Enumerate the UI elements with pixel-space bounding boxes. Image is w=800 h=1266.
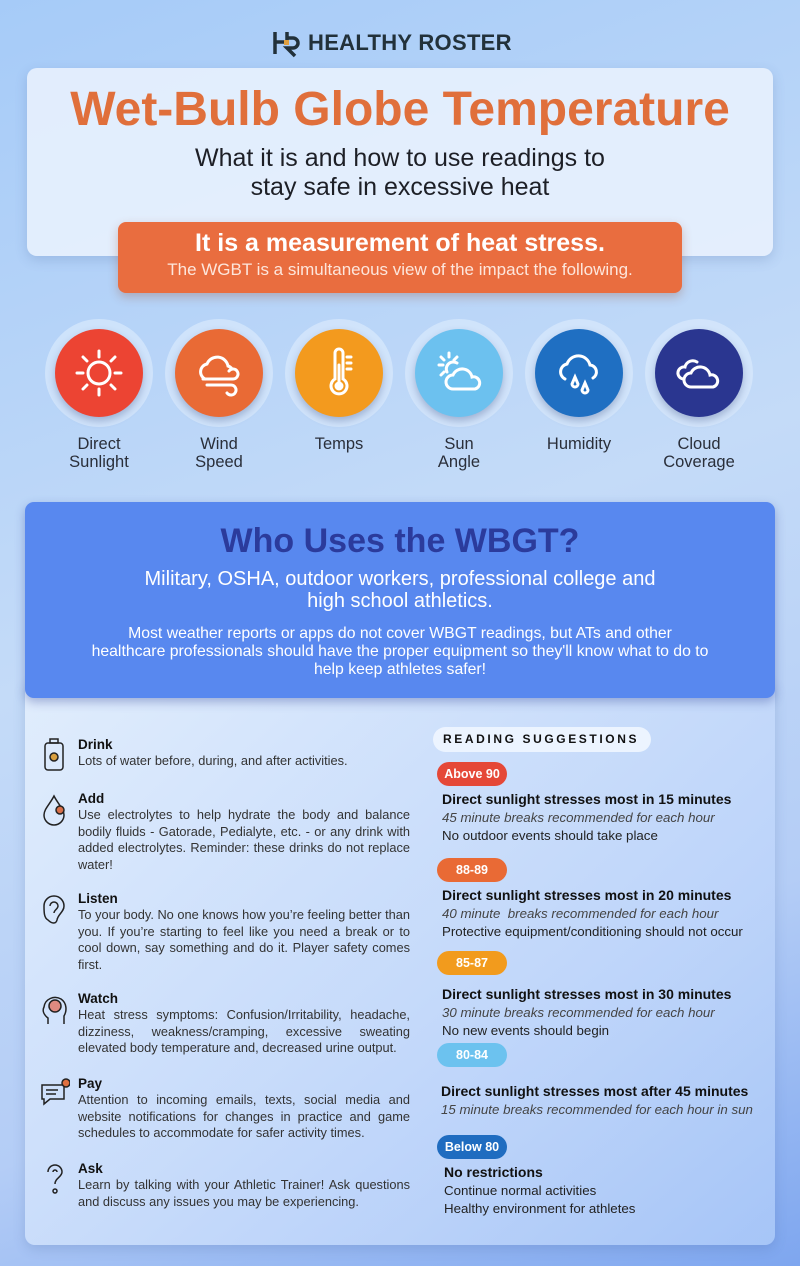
text: 85-87: 30 minute breaks recommended for each hour bbox=[442, 1005, 715, 1020]
text: users: high school athletics. bbox=[307, 590, 493, 612]
badge: 85-87: 85-87 bbox=[456, 956, 488, 970]
item: watch bbox=[42, 991, 410, 1055]
badge: above 90 bbox=[437, 762, 507, 786]
text: below 80 bbox=[444, 1164, 635, 1216]
badge: above 90: Above 90 bbox=[444, 767, 500, 781]
text: 80-84: 15 minute breaks recommended for each hour in sun bbox=[441, 1102, 753, 1117]
text: 88-89: Direct sunlight stresses most in 20 minutes bbox=[442, 887, 731, 903]
panel: title card bbox=[27, 68, 773, 256]
item: drink bbox=[44, 737, 348, 771]
item: ask: Ask bbox=[78, 1161, 103, 1176]
text: 85-87: Direct sunlight stresses most in 30 minutes bbox=[442, 986, 731, 1002]
text: below 80: No restrictions bbox=[444, 1164, 543, 1180]
text: 88-89: 40 minute breaks recommended for each hour bbox=[442, 906, 718, 921]
callout: heat stress bbox=[118, 222, 682, 293]
panel: who uses bbox=[25, 502, 775, 698]
labels: factors: Coverage bbox=[663, 453, 735, 471]
text: above 90: Direct sunlight stresses most in 15 minutes bbox=[442, 791, 731, 807]
badge: 88-89 bbox=[437, 858, 507, 882]
icon: cloud coverage bbox=[645, 319, 753, 427]
text: 85-87 bbox=[442, 986, 731, 1038]
badge: below 80 bbox=[437, 1135, 507, 1159]
badge: 80-84 bbox=[437, 1043, 507, 1067]
subtitle: stay safe in excessive heat bbox=[251, 173, 549, 201]
text: 80-84 bbox=[441, 1083, 753, 1117]
subtitle bbox=[195, 144, 605, 201]
item: drink: Drink bbox=[78, 737, 113, 752]
text: above 90 bbox=[442, 791, 731, 843]
item: pay: Attention to incoming emails, texts, social media and website notifications for changes in practice and game schedules to accommodate for safer activity times. bbox=[78, 1092, 410, 1140]
text: below 80: Continue normal activities bbox=[444, 1183, 596, 1198]
icon: head bbox=[42, 996, 67, 1024]
labels: factors: Sunlight bbox=[69, 453, 129, 471]
labels: factors: Cloud bbox=[677, 435, 721, 453]
labels: factors: Speed bbox=[195, 453, 243, 471]
item: add: Add bbox=[78, 791, 104, 806]
callout: heat stress: The WGBT is a simultaneous view of the impact the following. bbox=[167, 260, 633, 279]
icon: temps bbox=[285, 319, 393, 427]
icon: humidity bbox=[525, 319, 633, 427]
item: ask bbox=[47, 1161, 410, 1208]
text: note bbox=[92, 625, 708, 678]
heading: reading suggestions: READING SUGGESTIONS bbox=[443, 732, 639, 746]
text: 88-89: Protective equipment/conditioning should not occur bbox=[442, 924, 743, 939]
text: above 90: 45 minute breaks recommended for each hour bbox=[442, 810, 715, 825]
title: Wet-Bulb Globe Temperature bbox=[70, 83, 730, 136]
icon: sun angle bbox=[405, 319, 513, 427]
icon: wind bbox=[165, 319, 273, 427]
item: watch: Watch bbox=[78, 991, 118, 1006]
labels: factors: Sun bbox=[444, 435, 474, 453]
labels: factors: Angle bbox=[438, 453, 480, 471]
text: users bbox=[145, 568, 655, 612]
icon: drop bbox=[43, 794, 65, 826]
text: users: Military, OSHA, outdoor workers, professional college and bbox=[145, 568, 655, 590]
text: 85-87: No new events should begin bbox=[442, 1023, 609, 1038]
panel: bottom card bbox=[25, 680, 775, 1245]
badge: below 80: Below 80 bbox=[445, 1140, 499, 1154]
text: note: Most weather reports or apps do not cover WBGT readings, but ATs and other bbox=[128, 625, 672, 642]
labels: factors: Direct bbox=[77, 435, 121, 453]
item: listen: To your body. No one knows how you’re feeling better than you. If you’re starting to feel like you need a break or to cool down, say something and do it. Player safety comes first. bbox=[78, 907, 410, 972]
badge: 88-89: 88-89 bbox=[456, 863, 488, 877]
text: note: help keep athletes safer! bbox=[314, 661, 486, 678]
text: below 80: Healthy environment for athletes bbox=[444, 1201, 635, 1216]
icon: direct sunlight bbox=[45, 319, 153, 427]
item: drink: Lots of water before, during, and after activities. bbox=[78, 753, 348, 768]
item: pay: Pay bbox=[78, 1076, 102, 1091]
text: note: healthcare professionals should have the proper equipment so they'll know what to do to bbox=[92, 643, 708, 660]
badge: 85-87 bbox=[437, 951, 507, 975]
logo: HEALTHY ROSTER bbox=[308, 30, 512, 55]
text: 88-89 bbox=[442, 887, 743, 939]
icon: chat bbox=[41, 1078, 70, 1106]
item: listen: Listen bbox=[78, 891, 118, 906]
labels: factors: Wind bbox=[200, 435, 238, 453]
icon: question bbox=[47, 1164, 63, 1194]
item: ask: Learn by talking with your Athletic Trainer! Ask questions and discuss any issues you may be experiencing. bbox=[78, 1177, 410, 1208]
heading: who uses: Who Uses the WBGT? bbox=[221, 522, 579, 560]
heading: reading suggestions bbox=[433, 727, 651, 752]
text: above 90: No outdoor events should take place bbox=[442, 828, 658, 843]
callout: heat stress: It is a measurement of heat stress. bbox=[195, 229, 605, 257]
labels: factors: Humidity bbox=[547, 435, 611, 453]
item: pay bbox=[41, 1076, 410, 1140]
labels: factors bbox=[69, 435, 735, 471]
labels: factors: Temps bbox=[315, 435, 363, 453]
item: add: Use electrolytes to help hydrate the body and balance bodily fluids - Gatorade, Pedialyte, etc. - or any drink with added electrolytes. Reminder: these drinks do not replace water! bbox=[78, 807, 410, 872]
subtitle: What it is and how to use readings to bbox=[195, 144, 605, 172]
icon: ear bbox=[43, 895, 65, 924]
item: watch: Heat stress symptoms: Confusion/Irritability, headache, dizziness, weakness/cramping, excessive sweating elevated body temperature and, decreased urine output. bbox=[78, 1007, 410, 1055]
badge: 80-84: 80-84 bbox=[456, 1048, 488, 1062]
text: 80-84: Direct sunlight stresses most after 45 minutes bbox=[441, 1083, 748, 1099]
icon: bottle bbox=[44, 738, 64, 771]
